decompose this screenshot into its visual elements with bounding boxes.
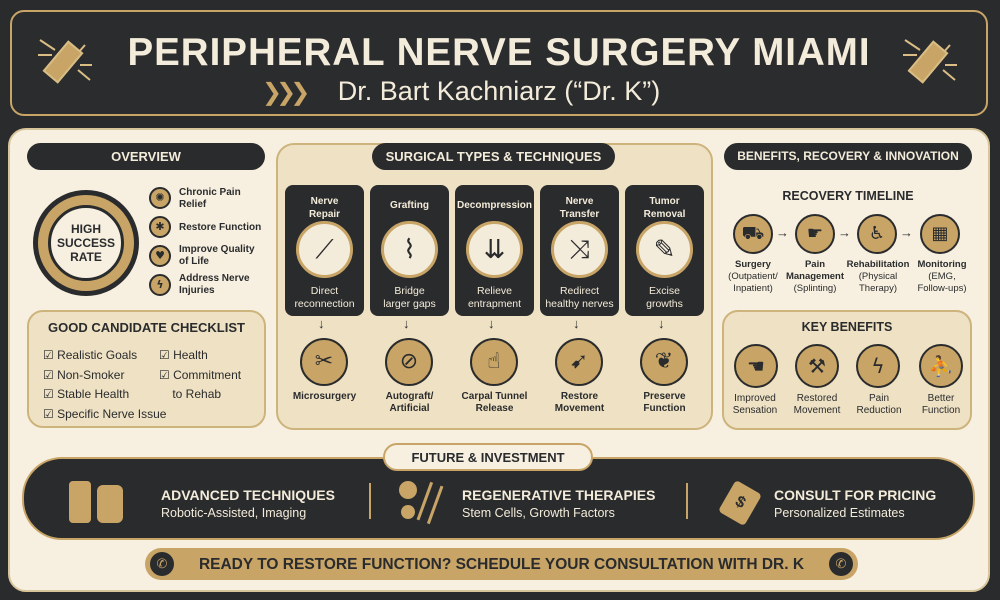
icon: nerve left — [38, 39, 92, 84]
benefit list: Injuries — [179, 285, 215, 296]
panel: benefits: Therapy) — [859, 283, 897, 294]
title: PERIPHERAL NERVE SURGERY MIAMI — [127, 31, 871, 74]
benefit list: Relief — [179, 199, 206, 210]
panel: key benefits: Reduction — [856, 405, 902, 416]
benefit list: ϟ — [156, 278, 164, 291]
item: consult pricing — [720, 481, 936, 525]
benefit list: Improve Quality — [179, 244, 255, 255]
technique outcomes: Carpal Tunnel — [462, 391, 527, 402]
panel: benefits — [724, 143, 972, 294]
item: consult pricing: CONSULT FOR PRICING — [774, 487, 936, 503]
card: grafting: larger gaps — [383, 298, 436, 310]
benefit list: ✺ — [155, 191, 165, 204]
panel: surgical types — [276, 143, 713, 430]
panel: benefits: Management — [786, 271, 844, 282]
card: nerve repair: Direct — [311, 285, 338, 297]
technique outcomes: ↓ — [488, 316, 494, 331]
technique outcomes: Artificial — [389, 403, 430, 414]
panel: good candidate checklist: to Rehab — [172, 387, 221, 401]
panel: good candidate checklist: ☑ Commitment — [159, 368, 241, 382]
success ring: SUCCESS — [57, 236, 115, 250]
heading: surgical types: SURGICAL TYPES & TECHNIQUES — [386, 149, 601, 164]
panel: good candidate checklist: ☑ Stable Health — [43, 387, 129, 401]
panel: good candidate checklist: ☑ Health — [159, 348, 208, 362]
panel: good candidate checklist: GOOD CANDIDATE CHECKLIST — [48, 320, 245, 335]
panel: key benefits: Restored — [797, 393, 837, 404]
item: advanced techniques — [69, 481, 335, 523]
technique outcomes: Microsurgery — [293, 391, 356, 402]
benefit list: ✱ — [155, 220, 165, 233]
card: tumor removal: Removal — [644, 209, 685, 220]
benefit list: Chronic Pain — [179, 187, 241, 198]
panel: good candidate checklist: ☑ Realistic Goals — [43, 348, 137, 362]
panel: key benefits — [722, 310, 972, 430]
card: nerve transfer: Transfer — [560, 209, 599, 220]
card: tumor removal: Tumor — [649, 196, 680, 207]
item: regenerative: Stem Cells, Growth Factors — [462, 506, 615, 520]
panel: good candidate checklist: ☑ Specific Nerve Issue — [43, 406, 166, 420]
panel: benefits: Monitoring — [917, 259, 967, 270]
card: tumor removal: ✎ — [654, 234, 675, 264]
card: decompression: entrapment — [468, 298, 521, 310]
panel: key benefits: Improved — [734, 393, 776, 404]
item: regenerative — [399, 481, 655, 524]
recovery timeline: RECOVERY TIMELINE — [782, 189, 914, 203]
item: regenerative: REGENERATIVE THERAPIES — [462, 487, 655, 503]
benefit list — [149, 187, 261, 296]
card: grafting: Grafting — [390, 200, 429, 211]
technique outcomes: ☝ — [487, 349, 501, 374]
panel: benefits: ♿ — [869, 223, 885, 244]
call to action: ✆ — [157, 556, 167, 571]
chevrons: ❯❯❯ — [262, 79, 304, 106]
card: decompression: ⇊ — [484, 234, 505, 264]
success ring: HIGH — [71, 222, 101, 236]
panel: key benefits: Better — [928, 393, 954, 404]
call to action — [145, 548, 858, 580]
card: decompression: Relieve — [477, 285, 512, 297]
panel: future & investment — [22, 457, 975, 540]
heading — [27, 143, 265, 170]
panel: benefits: (Outpatient/ — [728, 271, 778, 282]
call to action: ✆ — [836, 556, 846, 571]
subtitle: Dr. Bart Kachniarz (“Dr. K”) — [338, 76, 660, 106]
item: consult pricing: Personalized Estimates — [774, 506, 905, 520]
panel: benefits: → — [776, 225, 789, 240]
panel: benefits: Follow-ups) — [917, 283, 967, 294]
panel: key benefits: ⛹ — [929, 354, 953, 378]
panel: overview — [27, 143, 265, 296]
technique outcomes: Function — [643, 403, 686, 414]
panel: key benefits: ☚ — [747, 354, 765, 378]
panel: key benefits: ϟ — [871, 354, 885, 378]
icon: nerve right — [903, 39, 957, 84]
heading: future & investment: FUTURE & INVESTMENT — [411, 450, 565, 465]
card: nerve repair: Nerve — [311, 196, 338, 207]
technique outcomes: ↓ — [403, 316, 410, 331]
panel: benefits: Inpatient) — [733, 283, 773, 294]
heading: BENEFITS, RECOVERY & INNOVATION — [737, 149, 959, 163]
panel: benefits: → — [838, 225, 851, 240]
technique outcomes: Preserve — [643, 391, 686, 402]
success ring: RATE — [70, 250, 102, 264]
card: tumor removal: growths — [646, 298, 683, 310]
card: nerve transfer — [540, 185, 619, 316]
panel: good candidate checklist — [27, 310, 266, 428]
card: grafting: ⌇ — [403, 234, 416, 264]
technique outcomes: ↓ — [658, 316, 664, 331]
heading: future & investment — [383, 443, 593, 471]
panel: benefits: Surgery — [735, 259, 771, 270]
technique outcomes: Movement — [555, 403, 604, 414]
card: tumor removal — [625, 185, 704, 316]
panel: key benefits: Sensation — [733, 405, 777, 416]
benefit list: Address Nerve — [179, 273, 250, 284]
card: nerve repair: Repair — [309, 209, 340, 220]
card: decompression — [455, 185, 534, 316]
panel: benefits: → — [900, 225, 913, 240]
item: consult pricing: $ — [732, 493, 748, 512]
card: nerve transfer: Nerve — [566, 196, 593, 207]
item: advanced techniques: Robotic-Assisted, Imaging — [161, 506, 306, 520]
technique outcomes: Release — [476, 403, 513, 414]
technique outcomes — [293, 316, 688, 414]
technique outcomes: ✂ — [315, 349, 333, 374]
card: tumor removal: Excise — [649, 285, 680, 297]
heading — [724, 143, 972, 170]
card: decompression: Decompression — [457, 200, 532, 211]
card: nerve repair: ⟋ — [315, 234, 334, 264]
panel: benefits: (Physical — [859, 271, 897, 282]
panel: key benefits: Movement — [794, 405, 840, 416]
technique outcomes: ↓ — [318, 316, 324, 331]
panel: key benefits: ⚒ — [808, 354, 826, 378]
panel: key benefits: KEY BENEFITS — [802, 320, 892, 334]
technique outcomes: ⊘ — [400, 349, 418, 374]
heading: OVERVIEW — [111, 149, 181, 164]
panel: benefits: ☛ — [807, 223, 823, 244]
technique outcomes: Restore — [561, 391, 598, 402]
main panel — [8, 128, 990, 592]
technique outcomes: Autograft/ — [386, 391, 433, 402]
technique outcomes: ❦ — [655, 349, 673, 374]
card: nerve repair — [285, 185, 364, 316]
panel: benefits: ▦ — [931, 223, 948, 244]
benefit list: of Life — [179, 256, 209, 267]
benefit list: Restore Function — [179, 222, 261, 233]
card: nerve transfer: Redirect — [560, 285, 599, 297]
heading: surgical types — [372, 143, 615, 170]
panel: benefits: (Splinting) — [794, 283, 836, 294]
panel: key benefits: Function — [922, 405, 960, 416]
panel: benefits: (EMG, — [928, 271, 956, 282]
success ring — [33, 190, 139, 296]
card: nerve transfer: healthy nerves — [545, 298, 614, 310]
panel: key benefits: Pain — [869, 393, 889, 404]
benefit list: ♥ — [155, 249, 165, 262]
panel: benefits: Rehabilitation — [847, 259, 909, 270]
card: grafting: Bridge — [394, 285, 425, 297]
card: grafting — [370, 185, 449, 316]
technique outcomes: ↓ — [573, 316, 580, 331]
technique outcomes: ➹ — [570, 349, 588, 374]
card: nerve transfer: ⤨ — [569, 234, 590, 264]
panel: benefits: ⛟ — [742, 223, 764, 244]
item: advanced techniques: ADVANCED TECHNIQUES — [161, 487, 335, 503]
card: nerve repair: reconnection — [294, 298, 355, 310]
header — [10, 10, 988, 116]
call to action: READY TO RESTORE FUNCTION? SCHEDULE YOUR CONSULTATION WITH DR. K — [199, 556, 804, 573]
panel: good candidate checklist: ☑ Non-Smoker — [43, 368, 124, 382]
panel: benefits: Pain — [805, 259, 825, 270]
